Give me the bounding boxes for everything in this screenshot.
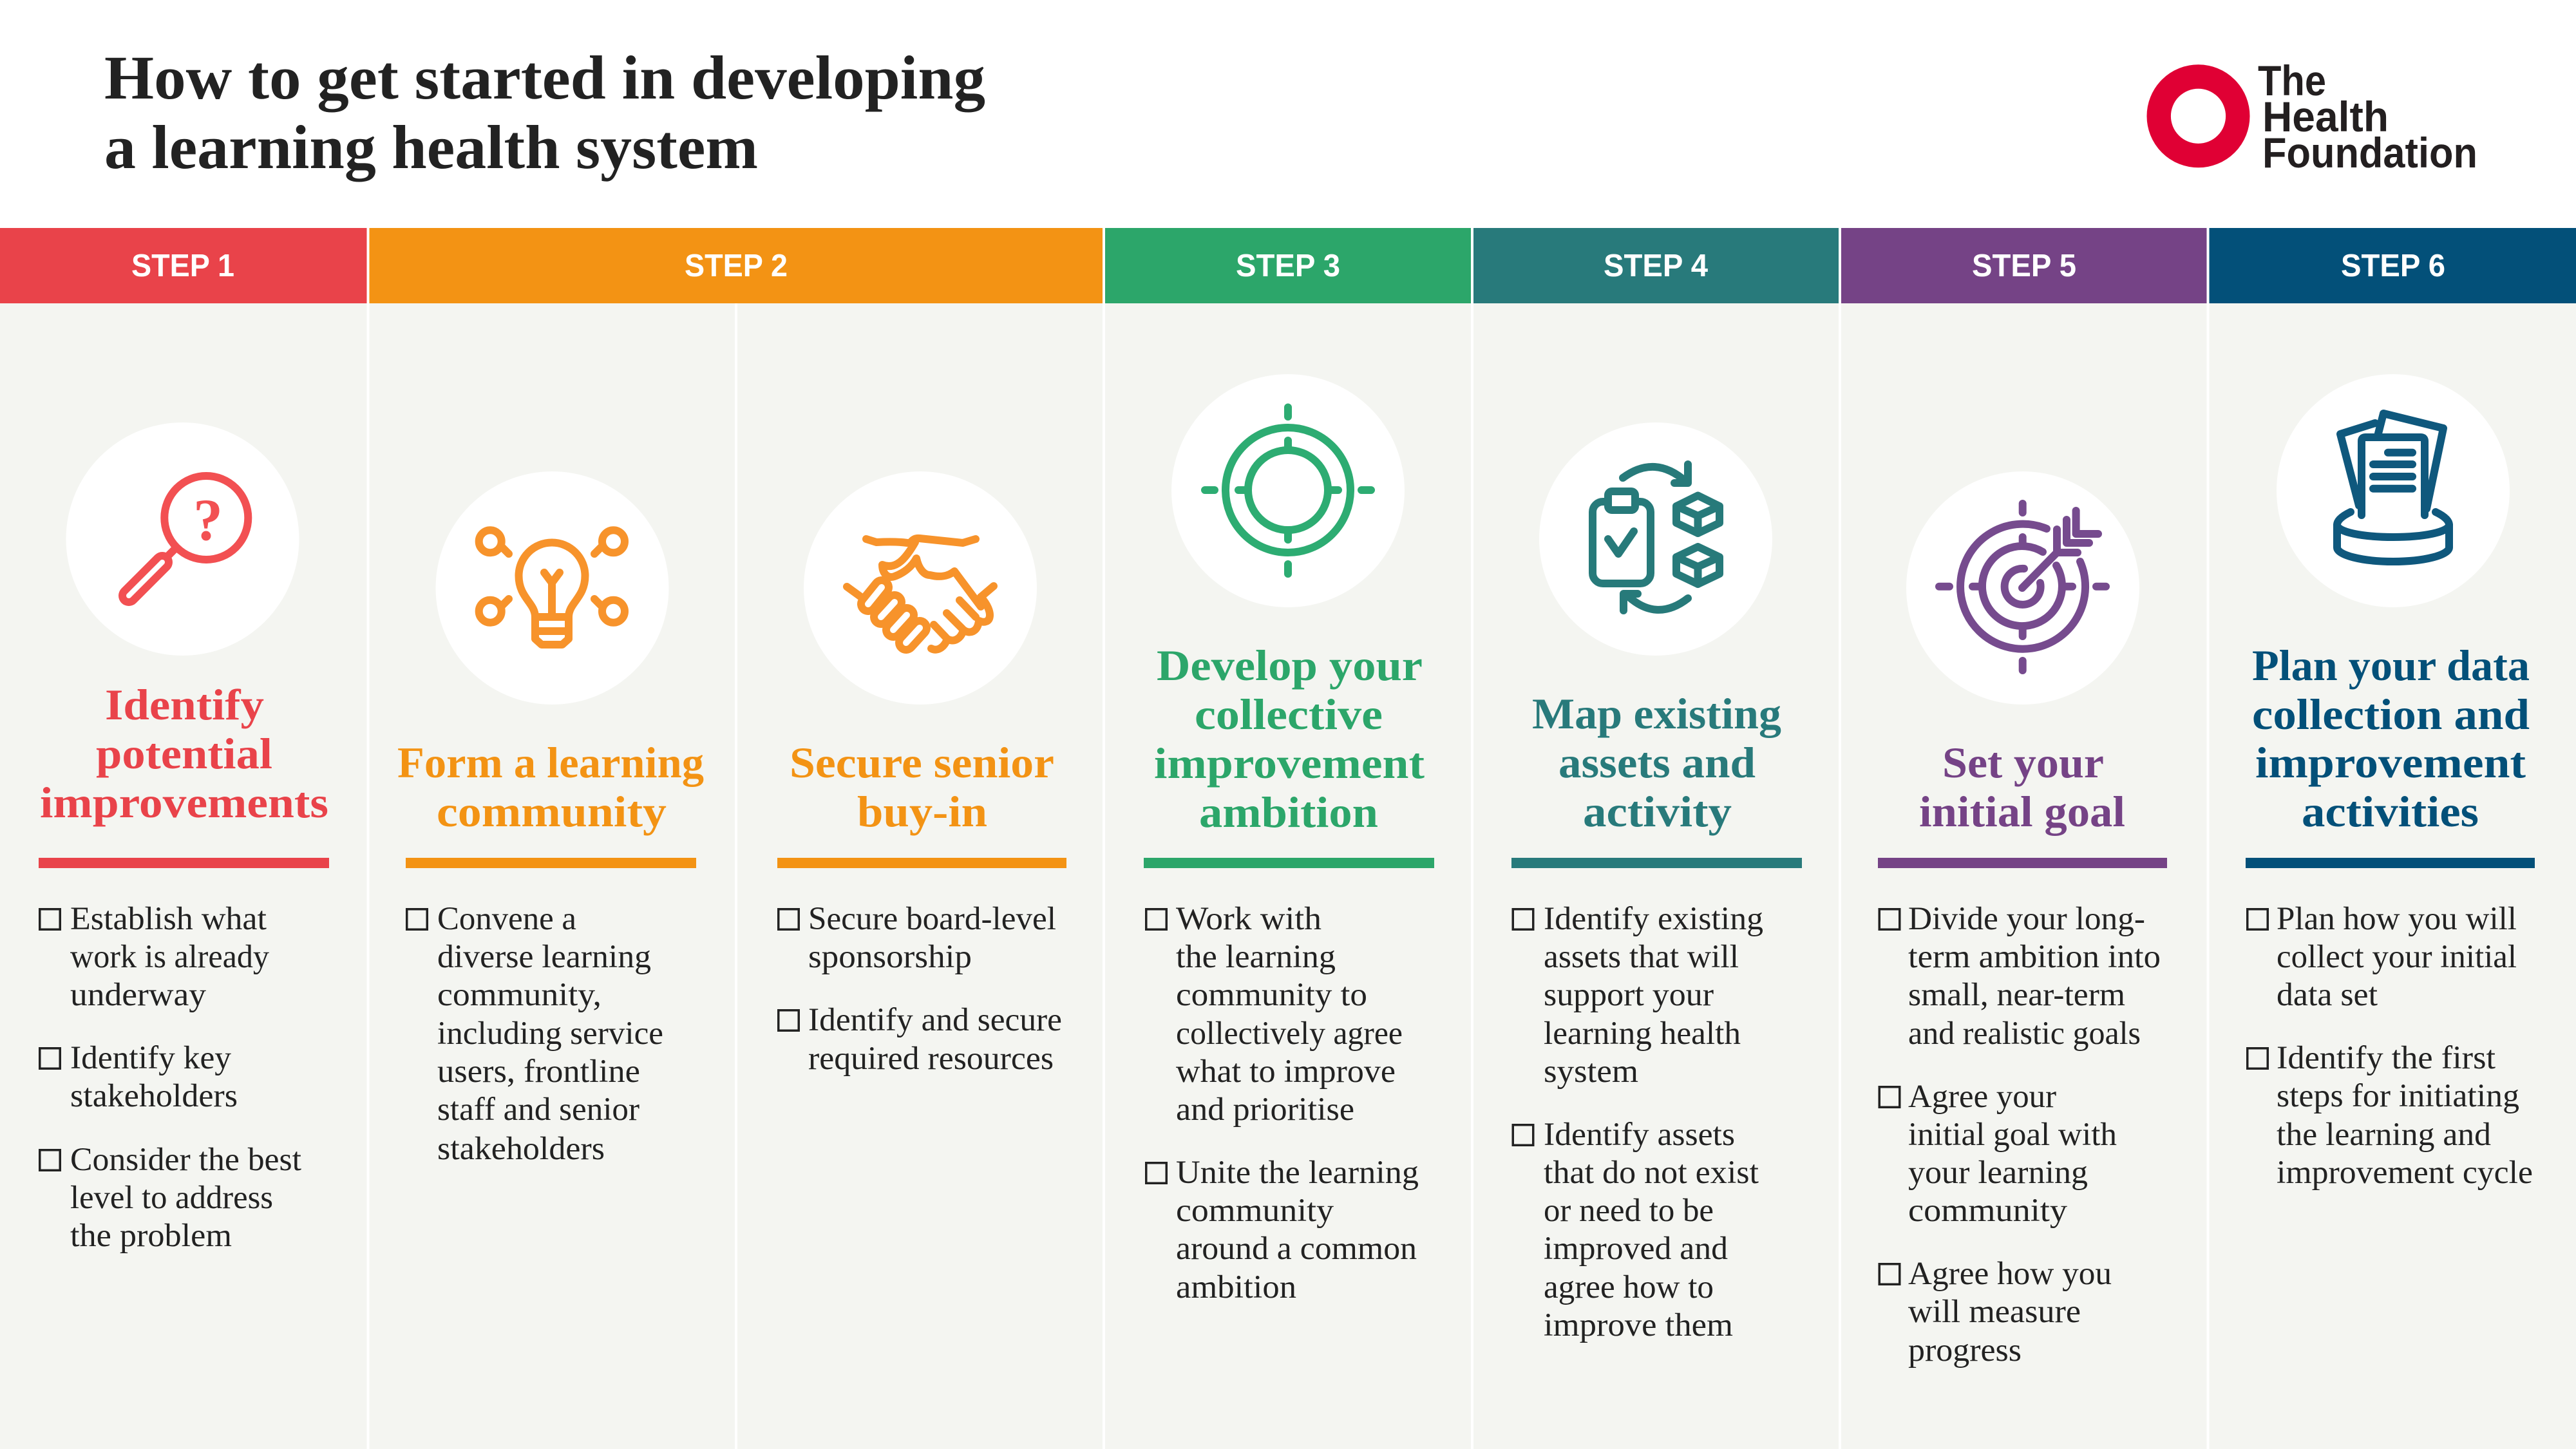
heading: community — [437, 787, 667, 836]
heading: collection and — [2252, 690, 2530, 739]
heading: Develop your — [1157, 641, 1423, 690]
panel: set your initial goal — [1878, 471, 2167, 1368]
checklist: stakeholders — [70, 1078, 238, 1114]
checklist: the learning — [1176, 939, 1336, 975]
checklist: Identify assets — [1544, 1117, 1735, 1153]
step 6 header — [2209, 228, 2576, 303]
icon: magnifying glass — [66, 422, 299, 656]
checklist — [1513, 901, 1763, 1343]
checklist: including service — [437, 1016, 663, 1052]
checklist: around a common — [1176, 1231, 1417, 1267]
checklist: required resources — [808, 1041, 1054, 1077]
checklist — [40, 901, 301, 1254]
checklist: collectively agree — [1176, 1016, 1403, 1052]
checklist — [1146, 901, 1419, 1305]
heading: initial goal — [1919, 787, 2125, 836]
checklist: Convene a — [437, 901, 576, 937]
checklist — [1879, 901, 2161, 1368]
heading — [790, 738, 1054, 836]
checklist: Agree how you — [1908, 1256, 2112, 1292]
checklist: that do not exist — [1544, 1155, 1759, 1191]
checklist: Identify existing — [1544, 901, 1763, 937]
heading — [1532, 689, 1781, 836]
checklist — [407, 901, 663, 1167]
panel: plan your data collection and improvement activities — [2246, 374, 2535, 1191]
heading: collective — [1195, 690, 1383, 739]
checklist: community to — [1176, 977, 1367, 1013]
checklist: will measure — [1908, 1294, 2081, 1330]
checklist: diverse learning — [437, 939, 651, 975]
icon: documents on stand — [2277, 374, 2510, 607]
checklist: work is already — [70, 939, 269, 975]
step 6 header: STEP 6 — [2341, 249, 2445, 283]
heading: Set your — [1942, 738, 2104, 787]
heading: improvement — [2255, 738, 2526, 787]
checklist: Identify key — [70, 1040, 232, 1076]
checklist: Divide your long- — [1908, 901, 2145, 937]
checklist: collect your initial — [2277, 939, 2517, 975]
icon: light bulb — [435, 471, 668, 705]
icon: clipboard and cubes — [1539, 422, 1772, 656]
checklist: the problem — [70, 1218, 232, 1254]
checklist: the learning and — [2277, 1117, 2491, 1153]
checklist: learning health — [1544, 1016, 1741, 1052]
step 5 header: STEP 5 — [1972, 249, 2076, 283]
panel: map existing assets and activity — [1511, 422, 1802, 1343]
step 4 header — [1473, 228, 1839, 303]
checklist: Plan how you will — [2277, 901, 2517, 937]
icon: magnifying glass: ? — [193, 487, 223, 553]
logo: The Health Foundation — [2159, 57, 2477, 176]
checklist: what to improve — [1176, 1054, 1396, 1090]
icon: crosshair target — [1171, 374, 1405, 607]
checklist: level to address — [70, 1180, 273, 1216]
checklist: Agree your — [1908, 1079, 2056, 1115]
step 3 header: STEP 3 — [1236, 249, 1340, 283]
checklist: small, near-term — [1908, 977, 2125, 1013]
title — [104, 43, 985, 182]
checklist: staff and senior — [437, 1092, 639, 1128]
checklist: system — [1544, 1054, 1638, 1090]
step 2 header — [370, 228, 1103, 303]
panel: form a learning community — [397, 471, 704, 1167]
logo: The Health Foundation: The — [2258, 57, 2326, 104]
panel: identify potential improvements — [39, 422, 329, 1254]
checklist — [2248, 901, 2533, 1191]
step 4 header: STEP 4 — [1604, 249, 1708, 283]
heading: activities — [2302, 787, 2479, 836]
checklist: Establish what — [70, 901, 267, 937]
panel: develop your collective improvement ambition — [1144, 374, 1434, 1305]
step 5 header — [1841, 228, 2206, 303]
heading: Secure senior — [790, 738, 1054, 787]
checklist: agree how to — [1544, 1269, 1714, 1305]
checklist: progress — [1908, 1332, 2022, 1368]
checklist: Work with — [1176, 901, 1321, 937]
heading: Form a learning — [397, 738, 704, 787]
checklist: improve them — [1544, 1307, 1733, 1343]
heading: Map existing — [1532, 689, 1781, 738]
checklist: initial goal with — [1908, 1117, 2117, 1153]
heading — [397, 738, 704, 836]
step 1 header: STEP 1 — [131, 249, 234, 283]
heading — [2252, 641, 2530, 836]
checklist: stakeholders — [437, 1131, 605, 1167]
heading: improvement — [1154, 739, 1425, 788]
checklist: your learning — [1908, 1155, 2088, 1191]
heading: improvements — [40, 778, 328, 827]
title: How to get started in developing — [104, 43, 985, 112]
checklist: Secure board-level — [808, 901, 1056, 937]
logo: The Health Foundation: Foundation — [2262, 129, 2477, 176]
step 2 header: STEP 2 — [685, 249, 788, 283]
checklist: and prioritise — [1176, 1092, 1354, 1128]
checklist: community — [1176, 1193, 1334, 1229]
step 1 header — [0, 228, 367, 303]
checklist: support your — [1544, 977, 1714, 1013]
icon: target with arrow — [1906, 471, 2139, 705]
checklist: improved and — [1544, 1231, 1728, 1267]
panel: secure senior buy-in — [777, 471, 1066, 1077]
checklist: data set — [2277, 977, 2378, 1013]
checklist: sponsorship — [808, 939, 972, 975]
checklist: term ambition into — [1908, 939, 2161, 975]
checklist: Identify and secure — [808, 1002, 1062, 1038]
heading: Plan your data — [2252, 641, 2530, 690]
heading: Identify — [105, 680, 264, 729]
heading: assets and — [1558, 738, 1756, 787]
title: a learning health system — [104, 113, 758, 182]
heading: buy-in — [857, 787, 987, 836]
heading: ambition — [1199, 788, 1378, 837]
checklist: and realistic goals — [1908, 1016, 2141, 1052]
checklist: Consider the best — [70, 1142, 301, 1178]
heading — [1154, 641, 1425, 837]
heading — [1919, 738, 2125, 836]
checklist: steps for initiating — [2277, 1078, 2519, 1114]
checklist: users, frontline — [437, 1054, 640, 1090]
icon: handshake — [804, 471, 1037, 705]
checklist: community, — [437, 977, 601, 1013]
checklist: Identify the first — [2277, 1040, 2496, 1076]
checklist: improvement cycle — [2277, 1155, 2533, 1191]
checklist: community — [1908, 1193, 2068, 1229]
step 3 header — [1105, 228, 1471, 303]
checklist: assets that will — [1544, 939, 1739, 975]
logo: The Health Foundation: Health — [2262, 93, 2389, 140]
heading: activity — [1583, 787, 1732, 836]
checklist: Unite the learning — [1176, 1155, 1419, 1191]
checklist: or need to be — [1544, 1193, 1714, 1229]
checklist: underway — [70, 977, 207, 1013]
heading: potential — [96, 729, 272, 778]
heading — [40, 680, 328, 827]
checklist: ambition — [1176, 1269, 1296, 1305]
checklist — [779, 901, 1062, 1077]
